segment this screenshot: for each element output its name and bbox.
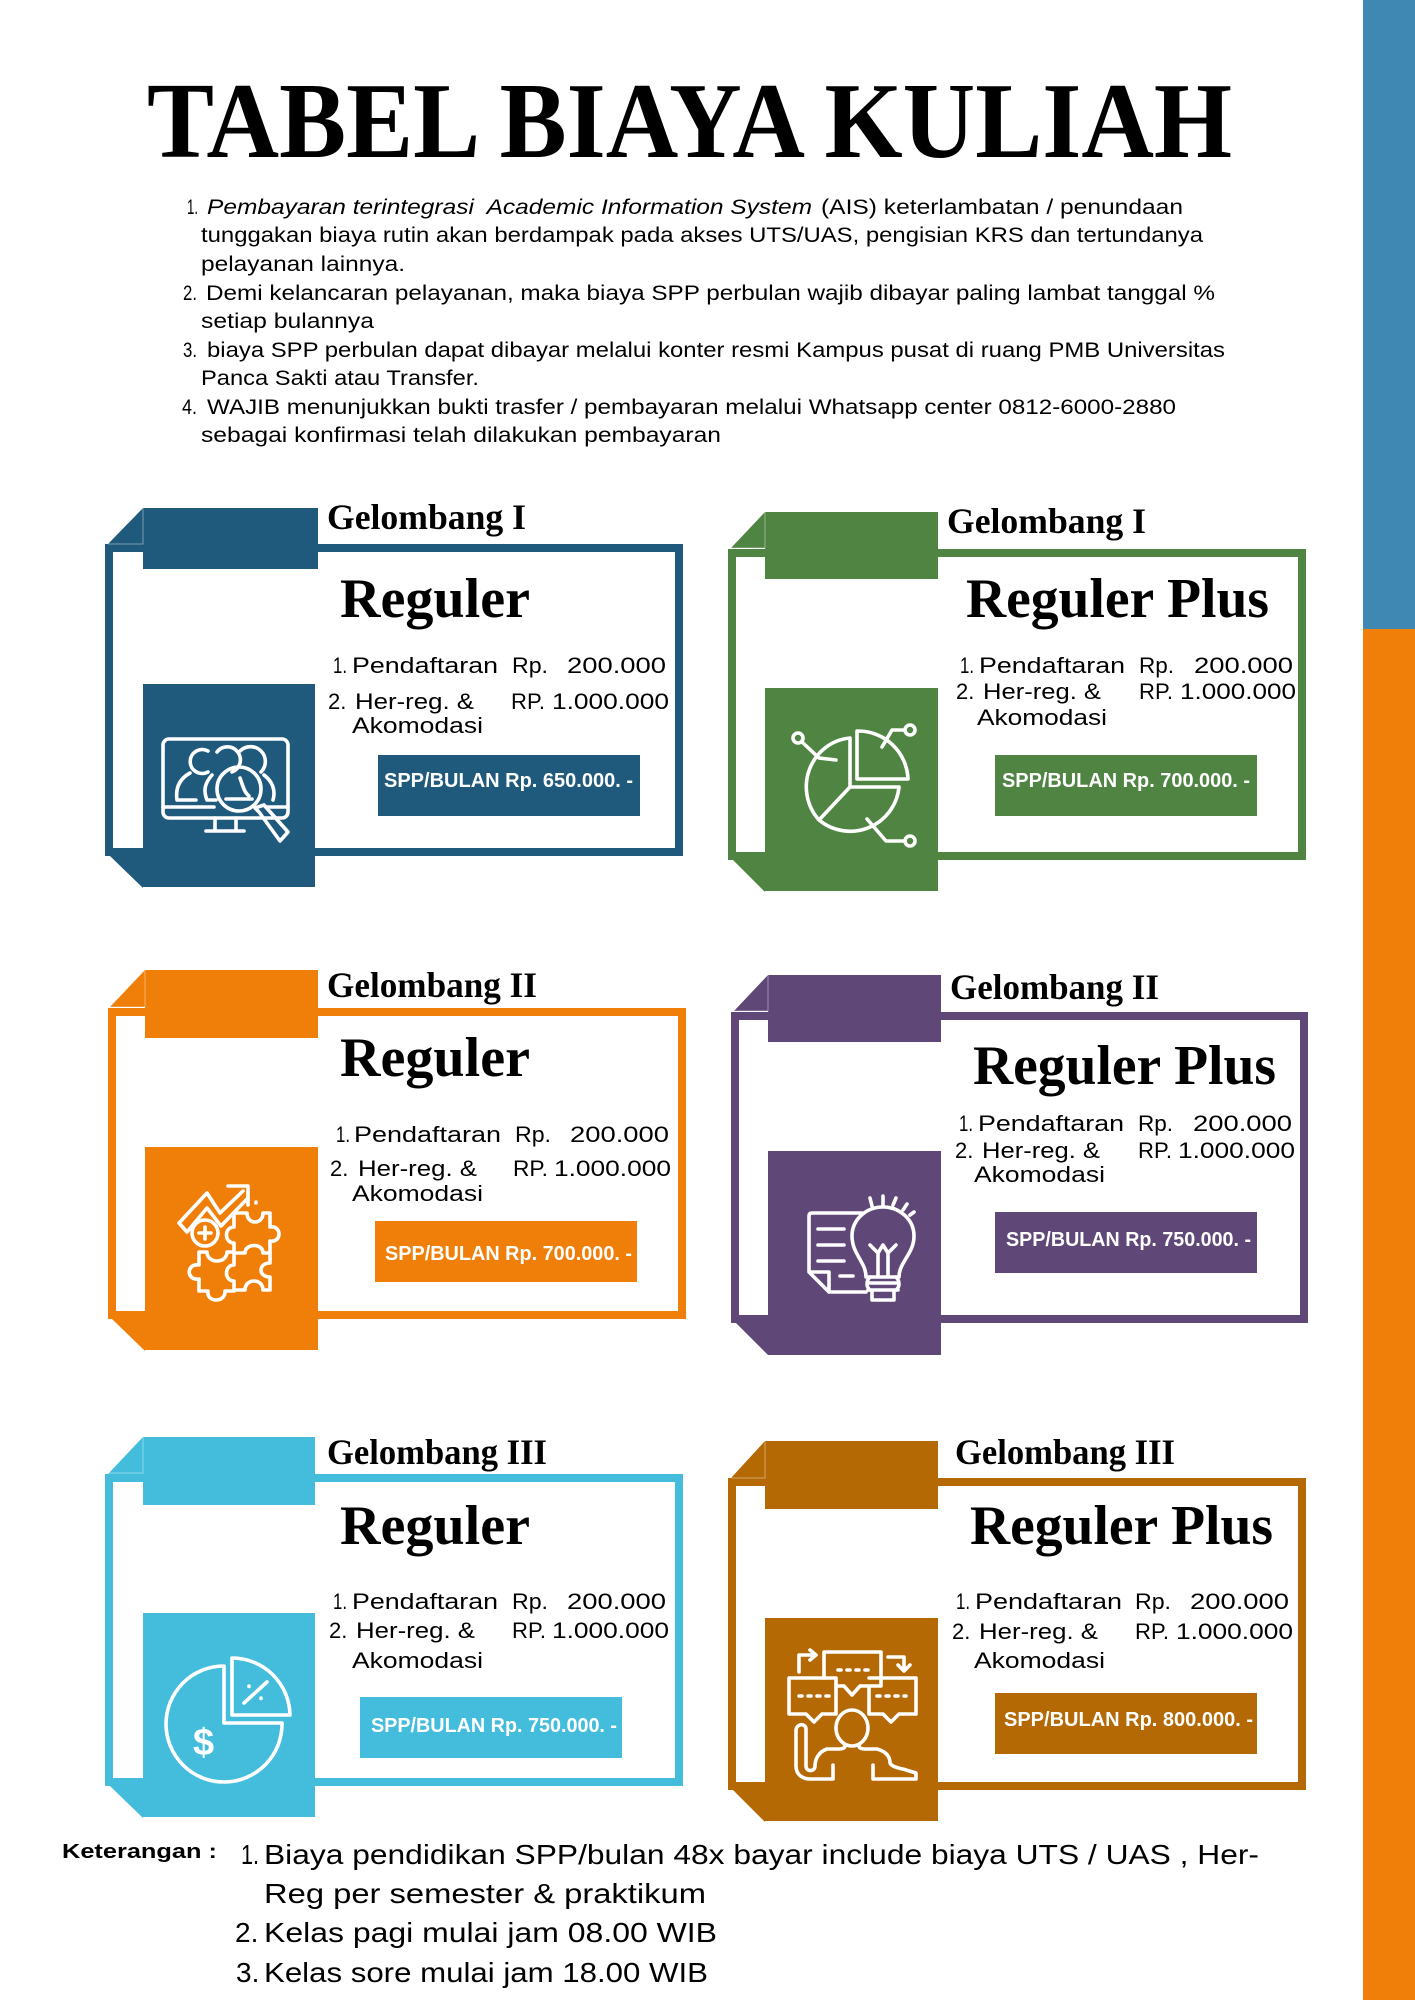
- payment notes list: Panca Sakti atau Transfer.: [201, 367, 479, 390]
- SPP price box: [378, 755, 640, 816]
- fee list: 2.: [330, 1156, 348, 1181]
- fee list: [955, 1111, 1295, 1187]
- footnote: Keterangan: 1.: [241, 1839, 259, 1870]
- card frame: [105, 1437, 683, 1818]
- fee list: 200.000: [567, 653, 666, 678]
- fee list: Her-reg. &: [358, 1156, 477, 1181]
- fee list: Pendaftaran: [354, 1122, 501, 1147]
- right side strip: [1363, 0, 1415, 2000]
- fee list: 200.000: [567, 1589, 666, 1614]
- fee list: Rp.: [512, 1589, 548, 1614]
- fee list: Rp.: [1139, 653, 1174, 678]
- fee list: Her-reg. &: [979, 1619, 1098, 1644]
- heading: Reguler Plus: Reguler Plus: [973, 1035, 1276, 1097]
- fee list: RP.: [512, 1618, 546, 1643]
- panel: Gelombang II Reguler Plus: [731, 967, 1308, 1355]
- SPP price box: [995, 1693, 1257, 1754]
- heading: Reguler Plus: Reguler Plus: [966, 568, 1269, 630]
- SPP price box: SPP/BULAN Rp. 700.000. -: [1002, 770, 1250, 792]
- SPP price box: [995, 1212, 1257, 1273]
- fee list: [952, 1589, 1293, 1673]
- fee list: 1.000.000: [554, 1156, 671, 1181]
- panel: Gelombang III Reguler: [105, 1432, 683, 1818]
- fee list: Akomodasi: [352, 1181, 483, 1206]
- title: TABEL BIAYA KULIAH: [147, 62, 1232, 181]
- fee list: 2.: [956, 679, 974, 704]
- fee list: Rp.: [1135, 1589, 1171, 1614]
- SPP price box: SPP/BULAN Rp. 800.000. -: [1004, 1709, 1253, 1731]
- fee list: 1.000.000: [552, 1618, 669, 1643]
- payment notes list: sebagai konfirmasi telah dilakukan pembayaran: [201, 424, 721, 447]
- heading: Reguler: Reguler: [340, 568, 530, 630]
- fee list: 1.000.000: [552, 689, 669, 714]
- fee list: RP.: [511, 689, 545, 714]
- panel: Gelombang II Reguler: [108, 965, 686, 1351]
- fee list: Pendaftaran: [352, 1589, 498, 1614]
- fee list: 1.000.000: [1180, 679, 1296, 704]
- fee list: Pendaftaran: [975, 1589, 1122, 1614]
- payment notes list: WAJIB menunjukkan bukti trasfer / pembayaran melalui Whatsapp center 0812-6000-2880: [207, 396, 1176, 419]
- fee list: Her-reg. &: [983, 679, 1101, 704]
- fee list: Rp.: [512, 653, 548, 678]
- fee list: [328, 653, 669, 738]
- fee list: Pendaftaran: [352, 653, 498, 678]
- footnote: Keterangan: Keterangan :: [62, 1841, 217, 1863]
- fee list: Akomodasi: [974, 1162, 1105, 1187]
- payment notes list: pelayanan lainnya.: [201, 253, 405, 276]
- footnote: Keterangan: 2.: [235, 1917, 258, 1948]
- footnote: Keterangan: [62, 1839, 1259, 1988]
- footnote: Keterangan: 3.: [236, 1957, 259, 1988]
- payment notes list: 3.: [183, 339, 197, 362]
- panel: Gelombang III Reguler Plus: [728, 1432, 1306, 1822]
- fee list: Akomodasi: [977, 705, 1107, 730]
- fee list: 200.000: [570, 1122, 669, 1147]
- fee list: Rp.: [515, 1122, 551, 1147]
- fee list: [329, 1589, 669, 1673]
- fee list: [956, 653, 1296, 730]
- heading: Gelombang I: Gelombang I: [947, 501, 1146, 541]
- card frame: [108, 970, 686, 1351]
- fee list: Rp.: [1138, 1111, 1173, 1136]
- fee list: Her-reg. &: [355, 689, 474, 714]
- heading: Gelombang II: Gelombang II: [327, 965, 537, 1005]
- heading: Gelombang III: Gelombang III: [327, 1432, 547, 1472]
- panel: Gelombang I Reguler Plus: [728, 501, 1306, 892]
- payment notes list: 1.: [187, 196, 198, 219]
- fee list: Akomodasi: [352, 1648, 483, 1673]
- fee list: RP.: [1135, 1619, 1169, 1644]
- fee list: Her-reg. &: [982, 1138, 1100, 1163]
- fee list: Akomodasi: [352, 713, 483, 738]
- fee list: 1.: [960, 653, 974, 678]
- icon: light bulb and note: [809, 1196, 914, 1300]
- card frame: [105, 508, 683, 888]
- fee list: 1.000.000: [1178, 1138, 1295, 1163]
- fee list: 1.: [333, 653, 347, 678]
- icon: pie chart with connectors: [793, 725, 915, 846]
- fee list: 2.: [952, 1619, 970, 1644]
- SPP price box: [375, 1221, 637, 1282]
- fee list: Akomodasi: [974, 1648, 1105, 1673]
- fee list: 1.: [336, 1122, 350, 1147]
- payment notes list: tunggakan biaya rutin akan berdampak pada akses UTS/UAS, pengisian KRS dan tertundanya: [201, 224, 1203, 247]
- icon: monitor with people and magnifier: [163, 739, 288, 841]
- footnote: Keterangan: Kelas pagi mulai jam 08.00 WIB: [264, 1917, 717, 1948]
- fee list: 2.: [955, 1138, 973, 1163]
- SPP price box: SPP/BULAN Rp. 750.000. -: [371, 1715, 617, 1737]
- SPP price box: SPP/BULAN Rp. 700.000. -: [385, 1243, 632, 1265]
- fee list: 1.: [959, 1111, 973, 1136]
- fee list: 1.: [333, 1589, 347, 1614]
- heading: Reguler: Reguler: [340, 1495, 530, 1557]
- payment notes list: 4.: [182, 396, 197, 419]
- SPP price box: [360, 1697, 622, 1758]
- SPP price box: SPP/BULAN Rp. 650.000. -: [384, 770, 633, 792]
- fee list: [330, 1122, 671, 1206]
- payment notes list: Demi kelancaran pelayanan, maka biaya SPP perbulan wajib dibayar paling lambat tanggal %: [206, 282, 1215, 305]
- icon: pie chart with dollar and percent: $: [193, 1722, 214, 1764]
- card frame: [731, 975, 1308, 1355]
- fee list: Her-reg. &: [356, 1618, 475, 1643]
- fee list: RP.: [513, 1156, 548, 1181]
- fee list: Pendaftaran: [979, 653, 1125, 678]
- SPP price box: SPP/BULAN Rp. 750.000. -: [1006, 1229, 1251, 1251]
- panel: Gelombang I Reguler: [105, 497, 683, 888]
- fee list: 1.000.000: [1176, 1619, 1293, 1644]
- payment notes list: [182, 196, 1225, 447]
- fee list: 2.: [329, 1618, 347, 1643]
- payment notes list: Pembayaran terintegrasi Academic Information System: [207, 196, 812, 219]
- footnote: Keterangan: Reg per semester & praktikum: [264, 1878, 706, 1909]
- SPP price box: [995, 755, 1257, 816]
- footnote: Keterangan: Biaya pendidikan SPP/bulan 48x bayar include biaya UTS / UAS , Her-: [264, 1839, 1259, 1870]
- payment notes list: setiap bulannya: [201, 310, 374, 333]
- heading: Gelombang I: Gelombang I: [327, 497, 526, 537]
- fee list: 200.000: [1190, 1589, 1289, 1614]
- payment notes list: (AIS) keterlambatan / penundaan: [821, 196, 1183, 219]
- heading: Reguler: Reguler: [340, 1027, 530, 1089]
- fee list: 1.: [956, 1589, 970, 1614]
- fee list: RP.: [1138, 1138, 1172, 1163]
- fee list: Pendaftaran: [978, 1111, 1124, 1136]
- heading: Gelombang III: Gelombang III: [955, 1432, 1175, 1472]
- heading: Reguler Plus: Reguler Plus: [970, 1495, 1273, 1557]
- fee list: 200.000: [1194, 653, 1293, 678]
- fee list: 2.: [328, 689, 346, 714]
- card frame: [728, 1441, 1306, 1822]
- icon: person with speech bubbles: [789, 1650, 916, 1779]
- payment notes list: biaya SPP perbulan dapat dibayar melalui konter resmi Kampus pusat di ruang PMB Universitas: [207, 339, 1225, 362]
- icon: puzzle with growth arrow: [179, 1186, 279, 1300]
- fee list: 200.000: [1193, 1111, 1292, 1136]
- footnote: Keterangan: Kelas sore mulai jam 18.00 WIB: [264, 1957, 708, 1988]
- fee list: RP.: [1139, 679, 1173, 704]
- card frame: [728, 512, 1306, 892]
- icon: pie chart with dollar and percent: [166, 1658, 290, 1782]
- heading: Gelombang II: Gelombang II: [950, 967, 1159, 1007]
- payment notes list: 2.: [183, 282, 197, 305]
